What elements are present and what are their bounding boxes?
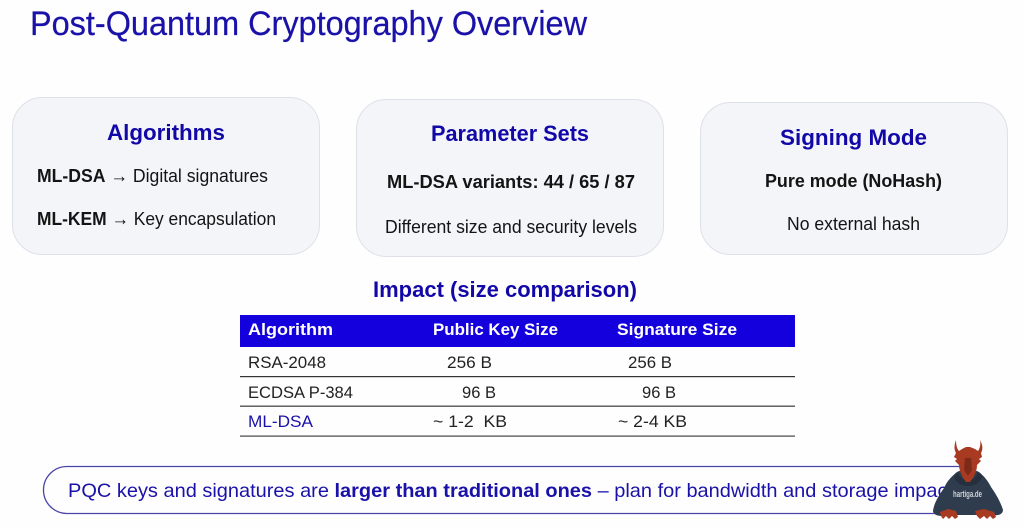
row: ML-DSA: ML-DSA [248, 412, 314, 431]
text: ML-KEM key encapsulation: ML-KEM → Key encapsulation [37, 208, 276, 229]
text: ML-DSA digital signatures: ML-DSA → Digital signatures [37, 165, 268, 186]
callout [43, 466, 960, 514]
dragon head [954, 440, 982, 482]
icon: dragon mascot in hoodie [933, 440, 1003, 519]
dragon snout [964, 458, 972, 476]
row: RSA-2048: RSA-2048 [248, 353, 326, 372]
table header: Public Key Size [433, 320, 558, 339]
text: ML-DSA variants: ML-DSA variants: 44 / 65 / 87 [387, 171, 635, 192]
table header [240, 315, 795, 347]
row: ECDSA P-384: ECDSA P-384 [248, 383, 353, 402]
heading: algorithms: Algorithms [107, 120, 225, 145]
text: different size and security levels: Different size and security levels [385, 216, 637, 237]
row: ML-DSA: ~ 2-4 KB [618, 412, 687, 431]
table header: Algorithm [248, 320, 333, 339]
row: ML-DSA: ~ 1-2 KB [433, 412, 507, 431]
title: Post-Quantum Cryptography Overview [30, 5, 587, 43]
row: ECDSA P-384: 96 B [642, 383, 676, 402]
table: size comparison [240, 315, 795, 437]
row: RSA-2048: 256 B [628, 353, 672, 372]
heading: parameter sets: Parameter Sets [431, 121, 589, 146]
heading: impact: Impact (size comparison) [373, 277, 637, 302]
panel: signing mode [700, 102, 1008, 254]
hoodie text: hartiga.de [953, 489, 982, 500]
hoodie [933, 470, 1003, 516]
callout: PQC keys and signatures are larger than traditional ones – plan for bandwidth and storage impact [68, 480, 954, 502]
row: ECDSA P-384 [240, 383, 795, 407]
row: ML-DSA [240, 412, 795, 437]
row: RSA-2048: 256 B [447, 353, 492, 372]
dragon claws [940, 509, 958, 519]
panel: algorithms [12, 98, 320, 254]
text: no external hash: No external hash [787, 213, 920, 234]
panel: parameter sets [356, 100, 664, 256]
heading: signing mode: Signing Mode [780, 125, 927, 150]
row: ECDSA P-384: 96 B [462, 383, 496, 402]
text: pure mode: Pure mode (NoHash) [765, 170, 942, 191]
hood collar [954, 472, 982, 486]
row: RSA-2048 [240, 353, 795, 377]
table header: Signature Size [617, 320, 737, 339]
